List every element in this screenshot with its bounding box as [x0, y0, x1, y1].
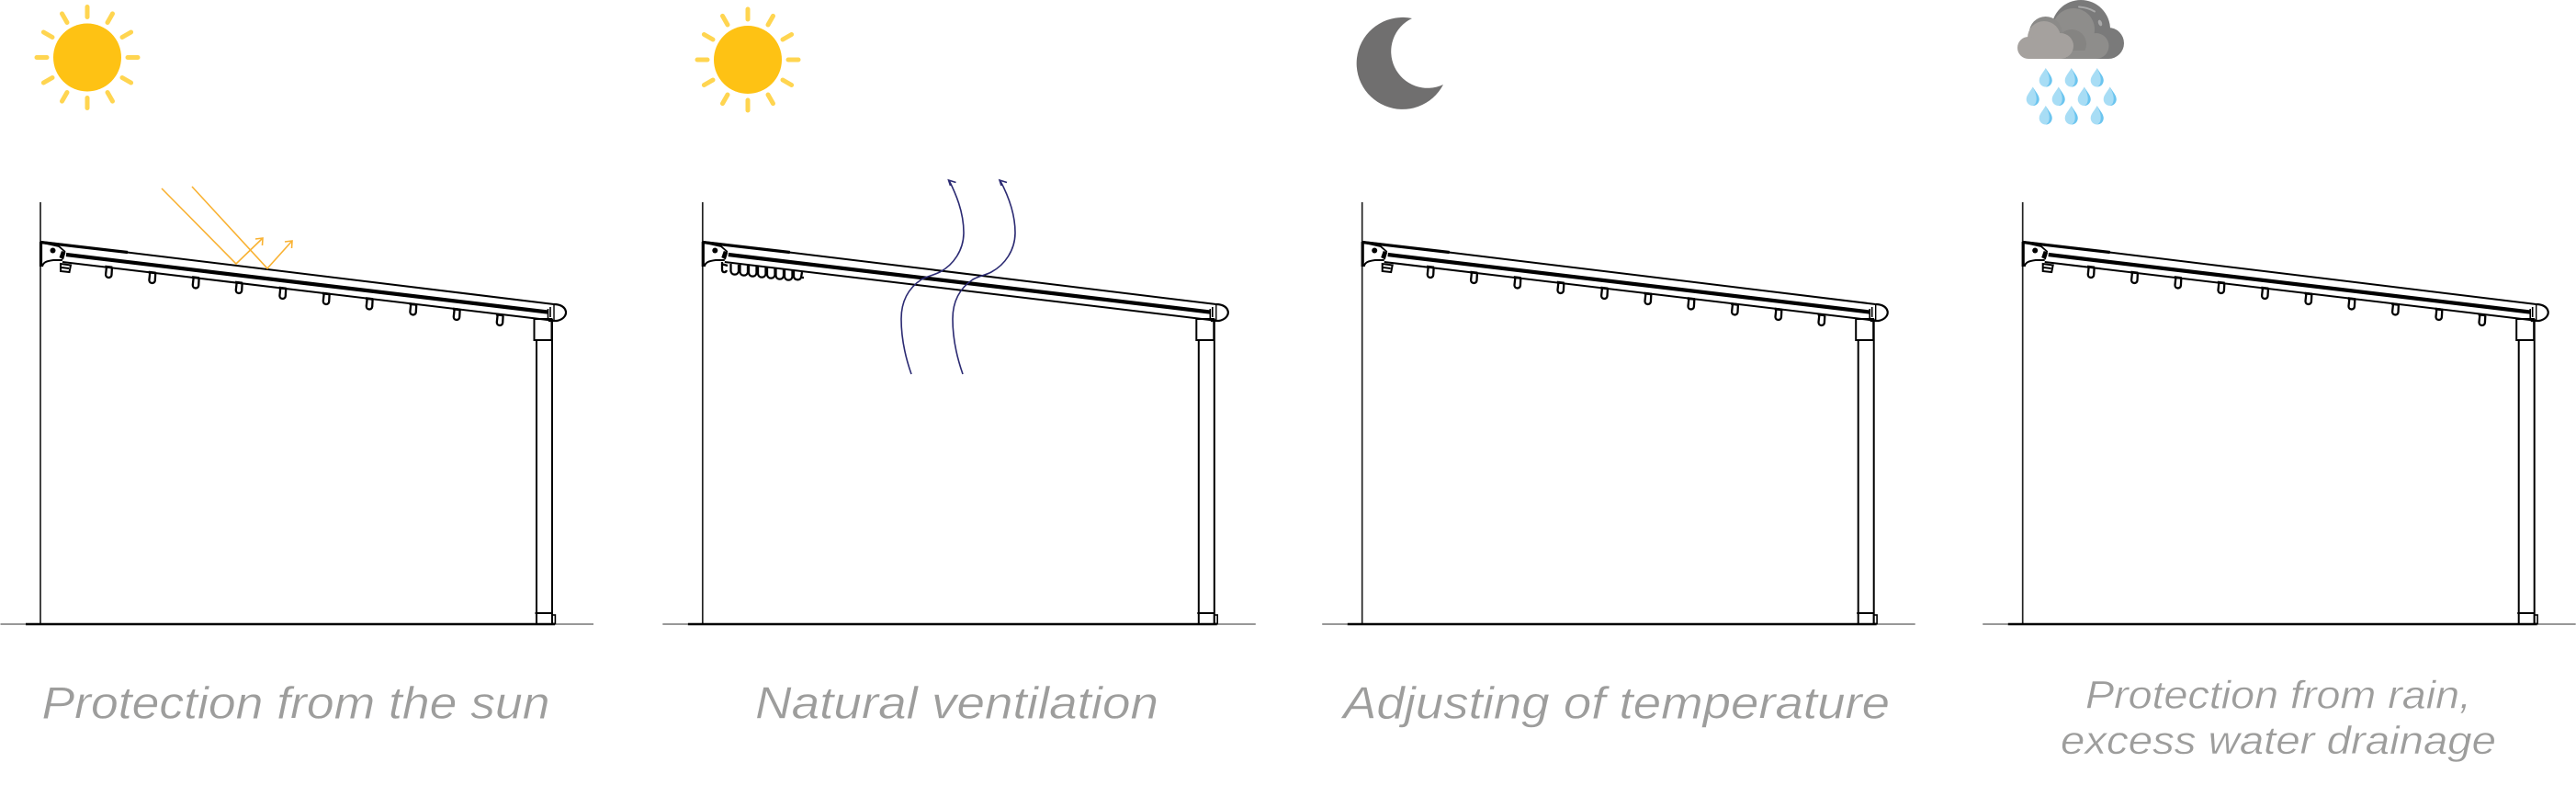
caption: natural ventilation: Natural ventilation [755, 678, 1158, 728]
panel: protection from the sun [0, 7, 593, 728]
caption: protection from the sun: Protection from the sun [42, 678, 549, 728]
panel: adjusting of temperature [1322, 17, 1915, 728]
caption: adjusting of temperature: Adjusting of temperature [1340, 678, 1890, 728]
icon: sun [697, 9, 798, 110]
icon: rain cloud [2017, 0, 2124, 59]
awning diagram with closed slats [0, 202, 593, 624]
caption: protection from rain, excess water drainage: Protection from rain, [2085, 673, 2471, 717]
awning diagram with gathered slats [662, 202, 1256, 624]
icon: rain drops [2027, 68, 2117, 125]
panel: natural ventilation [662, 9, 1256, 728]
awning diagram with closed slats [1322, 202, 1915, 624]
arrows: reflected sun rays [162, 187, 292, 268]
icon: sun [37, 7, 138, 108]
panel: protection from rain [1983, 0, 2576, 763]
awning diagram with closed slats [1983, 202, 2576, 624]
caption: protection from rain, excess water drainage: excess water drainage [2061, 719, 2496, 763]
icon: moon [1357, 17, 1443, 109]
arrows: rising air flow [901, 180, 1015, 374]
caption: protection from rain, excess water drainage [2061, 673, 2496, 763]
